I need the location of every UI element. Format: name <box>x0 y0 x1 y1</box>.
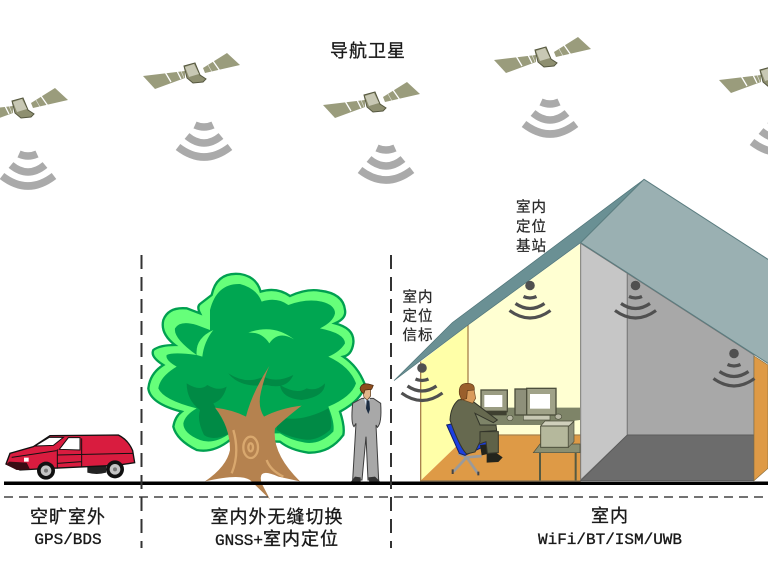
signal waves 1 <box>2 154 54 186</box>
house <box>394 179 768 481</box>
empty room back wall <box>627 273 754 435</box>
label: indoor beacon: 室内 <box>402 289 434 306</box>
title: 导航卫星 <box>330 41 406 61</box>
empty room side wall <box>581 243 627 480</box>
label: indoor: 室内 <box>591 506 629 526</box>
person <box>450 383 503 463</box>
back wall of office <box>468 243 581 435</box>
van bumper <box>6 462 30 470</box>
wheels <box>37 460 124 480</box>
printer <box>541 421 574 447</box>
person standing <box>351 384 381 482</box>
van windows <box>35 437 63 446</box>
printer table <box>533 444 580 481</box>
canopy shadow <box>187 373 331 440</box>
dashed section line <box>4 496 768 498</box>
chair <box>447 423 489 475</box>
satellite 3 <box>323 82 420 118</box>
empty room floor <box>581 435 754 481</box>
red van <box>6 435 135 480</box>
satellite 2 <box>143 53 240 89</box>
roof side <box>394 179 644 381</box>
signal waves 5 <box>752 120 768 152</box>
label: GNSS plus indoor positioning: GNSS+室内定位 <box>215 529 339 550</box>
van underside shadow <box>87 464 106 474</box>
label: indoor base station: 基站 <box>516 238 547 255</box>
label: seamless switching: 室内外无缝切换 <box>210 507 344 527</box>
roof top <box>581 179 768 364</box>
tree canopy dark <box>158 284 356 443</box>
office worker and desk <box>447 383 580 481</box>
label: open outdoor: 空旷室外 <box>30 507 106 527</box>
label: indoor base station: 室内 <box>516 199 547 216</box>
ground line <box>4 482 768 485</box>
base station in side room left <box>615 281 656 318</box>
label: indoor technologies: WiFi/BT/ISM/UWB <box>538 531 682 549</box>
tree <box>148 274 365 499</box>
tree canopy light <box>148 274 365 453</box>
signal waves 4 <box>524 102 576 134</box>
desk top <box>472 408 580 425</box>
label: GPS BDS: GPS/BDS <box>34 531 102 549</box>
label: indoor beacon: 定位 <box>402 308 434 325</box>
divider left <box>140 255 142 548</box>
label: indoor base station: 定位 <box>516 218 547 236</box>
monitor left <box>480 390 507 415</box>
satellite 5 <box>719 57 768 93</box>
van body <box>6 435 135 470</box>
label: indoor beacon: 信标 <box>402 327 434 344</box>
signal waves 3 <box>360 148 412 180</box>
satellite 4 <box>494 37 591 73</box>
beacon in left wall <box>402 363 442 400</box>
base station in office <box>510 281 550 318</box>
tree trunk <box>205 366 302 499</box>
computer tower and monitor right <box>507 388 562 421</box>
satellite 1 <box>0 88 68 124</box>
left side wall <box>421 325 468 481</box>
signal waves 2 <box>178 125 230 157</box>
canopy highlight <box>197 329 294 357</box>
trunk knot <box>232 430 283 477</box>
divider right <box>390 255 392 548</box>
office floor <box>421 435 581 481</box>
right orange wall <box>754 356 768 481</box>
base station in side room right <box>714 349 754 386</box>
